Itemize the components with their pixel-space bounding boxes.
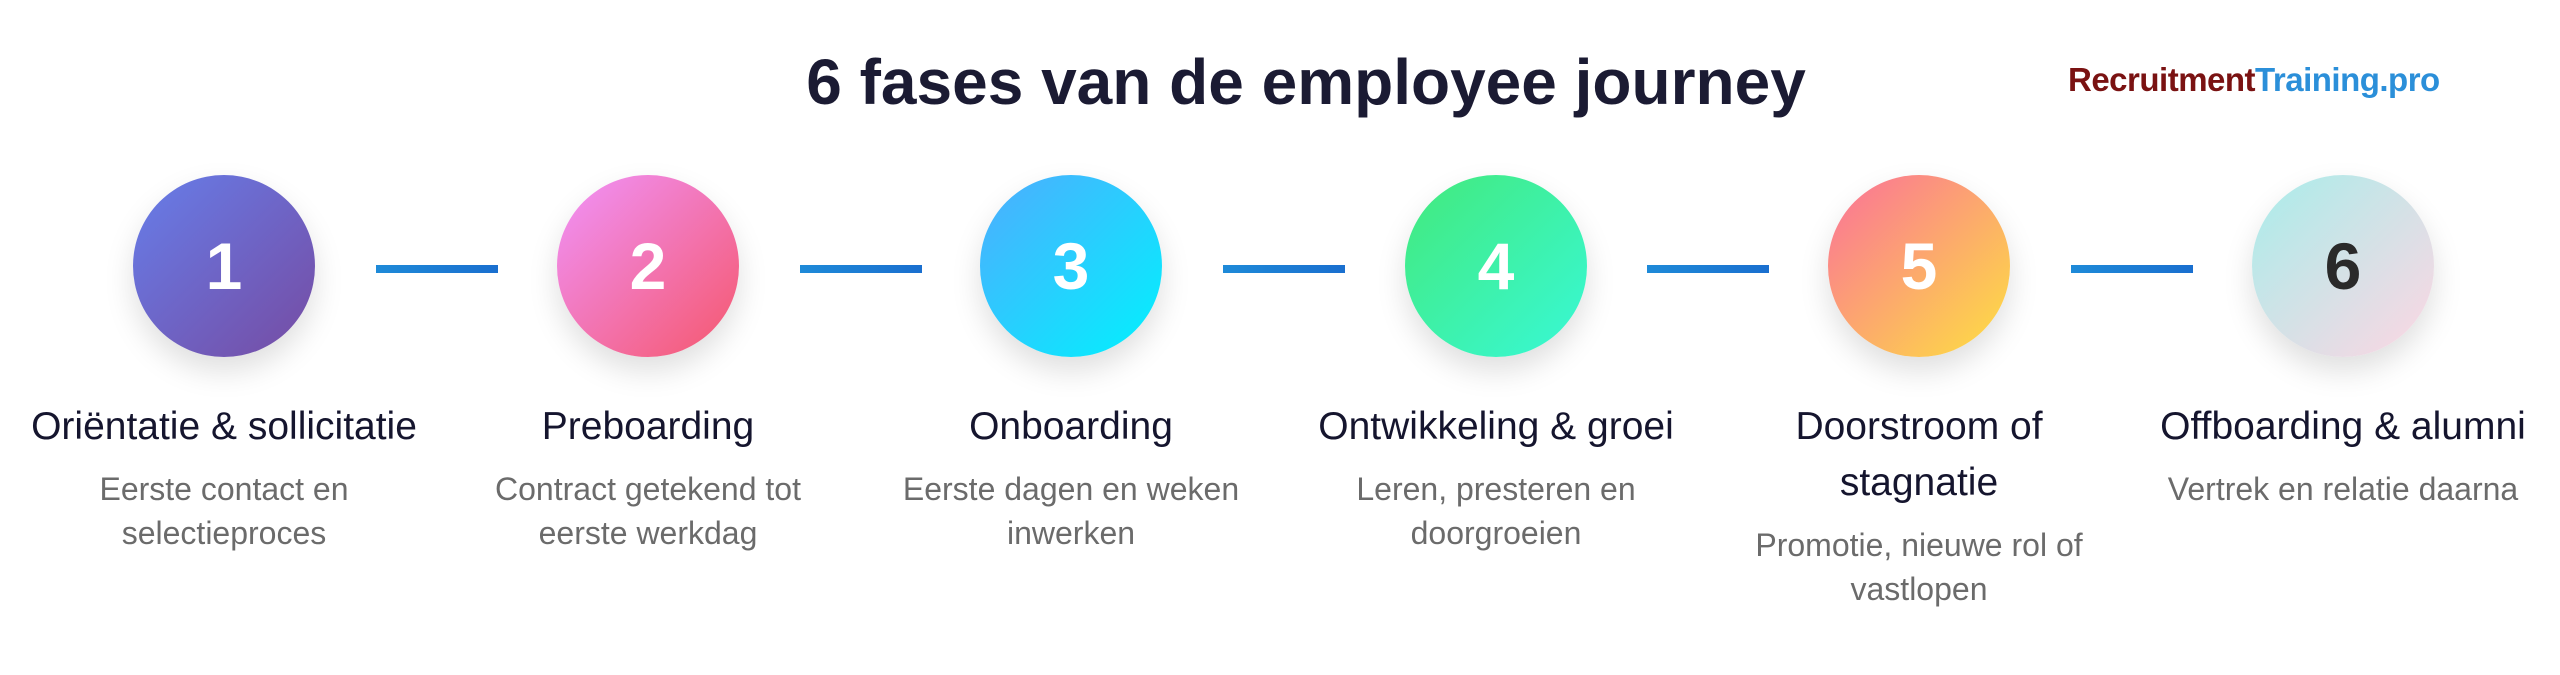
description 1: selectieproces [122,515,326,551]
connector 5-6 [2071,265,2193,273]
description 3: Eerste dagen en weken [903,471,1239,507]
heading 4: Ontwikkeling & groei [1318,405,1674,448]
description 1: Eerste contact en [99,471,349,507]
logo: RecruitmentTraining.pro [2068,61,2440,98]
circle 1: 1 [206,229,242,303]
heading 6: Offboarding & alumni [2160,405,2526,448]
heading 5 [1795,405,2043,504]
heading 2: Preboarding [542,405,754,448]
step 2 [495,175,801,551]
connector 2-3 [800,265,922,273]
circle 3 [980,175,1162,357]
description 2: Contract getekend tot [495,471,801,507]
heading 1: Oriëntatie & sollicitatie [31,405,417,448]
circle 6: 6 [2325,229,2361,303]
description 1 [99,471,349,551]
circle 4 [1405,175,1587,357]
circle 5: 5 [1901,229,1937,303]
step 1 [31,175,417,551]
heading 3: Onboarding [969,405,1173,448]
circle 3: 3 [1053,229,1089,303]
description 5: vastlopen [1850,571,1987,607]
description 5 [1755,527,2083,607]
description 5: Promotie, nieuwe rol of [1755,527,2083,563]
circle 2 [557,175,739,357]
description 2 [495,471,801,551]
circle 6 [2252,175,2434,357]
description 2: eerste werkdag [539,515,757,551]
step 6 [2160,175,2526,507]
heading 5: stagnatie [1840,461,1998,504]
step 5 [1755,175,2083,607]
description 4: doorgroeien [1411,515,1581,551]
connector 3-4 [1223,265,1345,273]
description 3: inwerken [1007,515,1135,551]
circle 1 [133,175,315,357]
connector 4-5 [1647,265,1769,273]
step 3 [903,175,1239,551]
description 4: Leren, presteren en [1356,471,1636,507]
heading 5: Doorstroom of [1795,405,2043,448]
description 6: Vertrek en relatie daarna [2168,471,2518,507]
circle 5 [1828,175,2010,357]
connector 1-2 [376,265,498,273]
description 3 [903,471,1239,551]
circle 4: 4 [1478,229,1514,303]
description 4 [1356,471,1636,551]
step 4 [1318,175,1674,551]
title: 6 fases van de employee journey [806,46,1806,118]
circle 2: 2 [630,229,666,303]
